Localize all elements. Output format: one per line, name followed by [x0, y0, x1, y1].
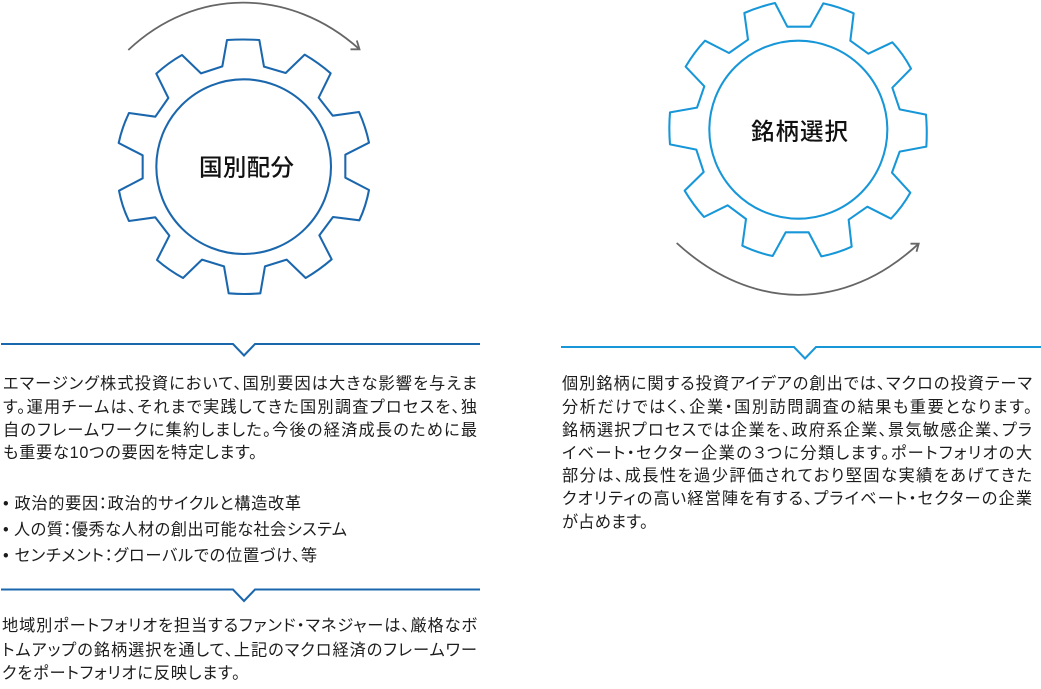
panel: country allocation gear	[119, 3, 369, 294]
text block: stock selection description: イベート・セクター企業の３つに分類します。ポートフォリオの大	[562, 444, 1032, 462]
text block: fund manager note: 地域別ポートフォリオを担当するファンド・マネジャーは、厳格なボ	[2, 617, 477, 635]
list: country factors: • 政治的要因：政治的サイクルと構造改革	[3, 495, 301, 513]
text block: stock selection description: 銘柄選択プロセスでは企業を、政府系企業、景気敏感企業、プラ	[562, 422, 1032, 440]
heading: stock selection: 銘柄選択	[751, 118, 848, 144]
text block: stock selection description: が占めます。	[562, 514, 648, 532]
icon: gear outline, country allocation	[119, 39, 369, 294]
text block: country factors intro: す。運用チームは、それまで実践してきた国別調査プロセスを、独	[3, 398, 477, 416]
text block: stock selection description: 部分は、成長性を過少評価されており堅固な実績をあげてきた	[562, 467, 1032, 485]
arrow: clockwise over gear	[128, 3, 360, 50]
panel: stock selection gear	[669, 3, 927, 295]
divider with notch: left lower	[1, 590, 480, 601]
text block: stock selection description: クオリティの高い経営陣を有する、プライベート・セクターの企業	[562, 490, 1032, 508]
text block: fund manager note	[2, 617, 477, 682]
arrow: counter-clockwise under gear	[677, 243, 919, 295]
text block: stock selection description	[562, 374, 1033, 532]
text block: stock selection description: 分析だけではく、企業・国別訪問調査の結果も重要となります。	[562, 398, 1032, 416]
text block: country factors intro	[3, 375, 477, 462]
list: country factors: • センチメント：グローバルでの位置づけ、等	[3, 547, 317, 565]
text block: fund manager note: クをポートフォリオに反映します。	[2, 664, 240, 682]
list: country factors	[3, 495, 347, 565]
text block: country factors intro: エマージング株式投資において、国別要因は大きな影響を与えま	[3, 375, 477, 393]
text block: fund manager note: トムアップの銘柄選択を通して、上記のマクロ経済のフレームワー	[2, 642, 477, 660]
divider with notch: right	[561, 347, 1041, 358]
list: country factors: • 人の質：優秀な人材の創出可能な社会システム	[3, 521, 347, 539]
text block: country factors intro: も重要な10つの要因を特定します。	[3, 444, 257, 462]
heading: country allocation: 国別配分	[199, 154, 294, 180]
divider with notch: left upper	[1, 344, 480, 356]
icon: gear outline, stock selection	[669, 3, 927, 256]
text block: country factors intro: 自のフレームワークに集約しました。今後の経済成長のために最	[3, 422, 477, 440]
text block: stock selection description: 個別銘柄に関する投資アイデアの創出では、マクロの投資テーマ	[562, 374, 1033, 393]
